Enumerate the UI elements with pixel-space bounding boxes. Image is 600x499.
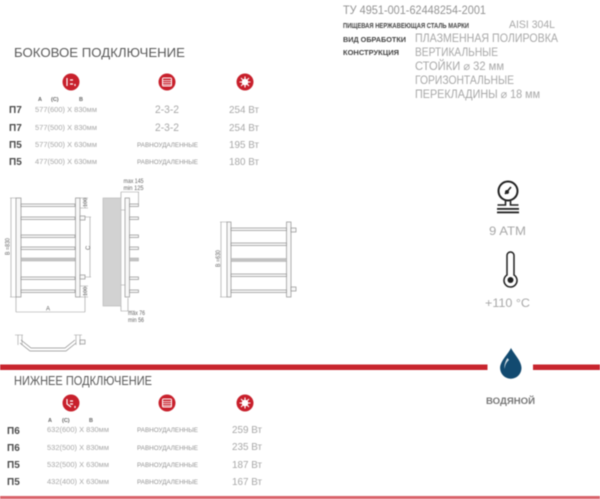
table: side connection: 254 Вт <box>229 122 259 134</box>
label: water type: ВОДЯНОЙ <box>486 395 535 406</box>
specification block: ПИЩЕВАЯ НЕРЖАВЕЮЩАЯ СТАЛЬ МАРКИ <box>343 23 469 30</box>
table: side connection: П7 <box>9 123 22 134</box>
table: bottom connection: 187 Вт <box>232 459 262 471</box>
table: bottom connection: 235 Вт <box>232 441 262 453</box>
table: side connection: 2-3-2 <box>155 122 179 134</box>
drawing: side view with wall: min 125 <box>124 186 144 192</box>
table: side connection: П7 <box>9 105 22 116</box>
table: bottom connection: 532(500) X 630мм <box>47 460 109 469</box>
drawing: side view with wall: max 145 <box>124 179 144 185</box>
table: bottom connection: A <box>48 418 52 424</box>
drawing: front view, five-bar towel rail: B =630 <box>216 249 222 267</box>
table: bottom connection: РАВНОУДАЛЕННЫЕ <box>137 427 199 434</box>
table: side connection: B <box>79 97 83 103</box>
icon: rail spacing, bottom table <box>158 394 176 412</box>
label: pressure: 9 ATM <box>489 224 526 238</box>
drawing: side view with wall <box>103 179 146 324</box>
specification block: ПЛАЗМЕННАЯ ПОЛИРОВКА <box>415 31 558 45</box>
table: bottom connection: П5 <box>7 477 20 488</box>
drawing: side view with wall: min 56 <box>128 318 145 324</box>
table: bottom connection: 167 Вт <box>232 476 262 488</box>
specification block <box>343 5 558 101</box>
red divider with gap <box>0 364 600 370</box>
table: side connection: П5 <box>9 140 22 151</box>
table: side connection: 2-3-2 <box>155 104 179 116</box>
table: bottom connection: (C) <box>62 418 70 424</box>
drawing: front view, seven-bar towel rail <box>6 198 92 312</box>
drawing: front view, seven-bar towel rail: B =830 <box>6 237 12 255</box>
table: side connection: 577(600) X 830мм <box>35 105 97 114</box>
table: bottom connection: 632(600) X 830мм <box>47 425 109 434</box>
heading: side connection: БОКОВОЕ ПОДКЛЮЧЕНИЕ <box>14 46 185 60</box>
specification block: ВИД ОБРАБОТКИ <box>343 37 406 44</box>
icon: power, bottom table <box>236 394 254 412</box>
table: bottom connection: РАВНОУДАЛЕННЫЕ <box>137 462 199 469</box>
table: bottom connection: РАВНОУДАЛЕННЫЕ <box>137 479 199 486</box>
table: side connection: 577(500) X 630мм <box>35 140 97 149</box>
label: temperature: +110 °C <box>485 296 530 310</box>
table: side connection: П5 <box>9 157 22 168</box>
table: bottom connection: 432(400) X 630мм <box>47 477 109 486</box>
table: bottom connection: B <box>89 418 93 424</box>
table: bottom connection: 259 Вт <box>232 424 262 436</box>
icon: thermometer <box>504 252 517 287</box>
table: side connection: A <box>38 97 42 103</box>
table: side connection: 180 Вт <box>229 156 259 168</box>
table: side connection: 195 Вт <box>229 139 259 151</box>
drawing: top view of rail <box>15 335 85 351</box>
drawing: front view, seven-bar towel rail: A <box>46 306 50 312</box>
drawing: front view, seven-bar towel rail: C <box>86 245 92 250</box>
icon: rail spacing, side table <box>158 74 176 90</box>
specification block: AISI 304L <box>509 19 555 31</box>
drawing: side view with wall: max 76 <box>128 311 146 317</box>
table: side connection: (C) <box>51 97 59 103</box>
specification block: ГОРИЗОНТАЛЬНЫЕ <box>415 73 514 87</box>
table: side connection: РАВНОУДАЛЕННЫЕ <box>137 142 199 149</box>
specification block: ВЕРТИКАЛЬНЫЕ <box>415 45 498 59</box>
table: bottom connection: 532(500) X 830мм <box>47 443 109 452</box>
table: side connection: 254 Вт <box>229 104 259 116</box>
specification block: КОНСТРУКЦИЯ <box>343 50 399 57</box>
specification block: ТУ 4951-001-62448254-2001 <box>343 5 486 17</box>
table: side connection: 577(500) X 830мм <box>35 123 97 132</box>
icon: connection, side table <box>62 74 80 90</box>
table: bottom connection: П5 <box>7 460 20 471</box>
icon: power, side table <box>236 74 254 90</box>
drawing: front view, seven-bar towel rail: 100 <box>83 287 89 296</box>
specification block: ПЕРЕКЛАДИНЫ ⌀ 18 мм <box>415 89 540 101</box>
icon: pressure gauge <box>497 182 519 213</box>
table: side connection: 477(500) X 630мм <box>35 157 97 166</box>
drawing: front view, five-bar towel rail <box>216 222 296 297</box>
specification block: СТОЙКИ ⌀ 32 мм <box>415 60 504 73</box>
table: bottom connection <box>7 418 262 488</box>
table: side connection: РАВНОУДАЛЕННЫЕ <box>137 159 199 166</box>
table: bottom connection: РАВНОУДАЛЕННЫЕ <box>137 445 199 452</box>
heading: bottom connection: НИЖНЕЕ ПОДКЛЮЧЕНИЕ <box>14 374 152 388</box>
drawing: front view, seven-bar towel rail: 100 <box>83 198 89 207</box>
icon: water drop <box>500 348 522 379</box>
table: bottom connection: П6 <box>7 426 20 437</box>
table: bottom connection: П6 <box>7 443 20 454</box>
table: side connection <box>9 97 259 168</box>
bottom red line <box>0 496 600 499</box>
icon: connection, bottom table <box>62 394 80 412</box>
